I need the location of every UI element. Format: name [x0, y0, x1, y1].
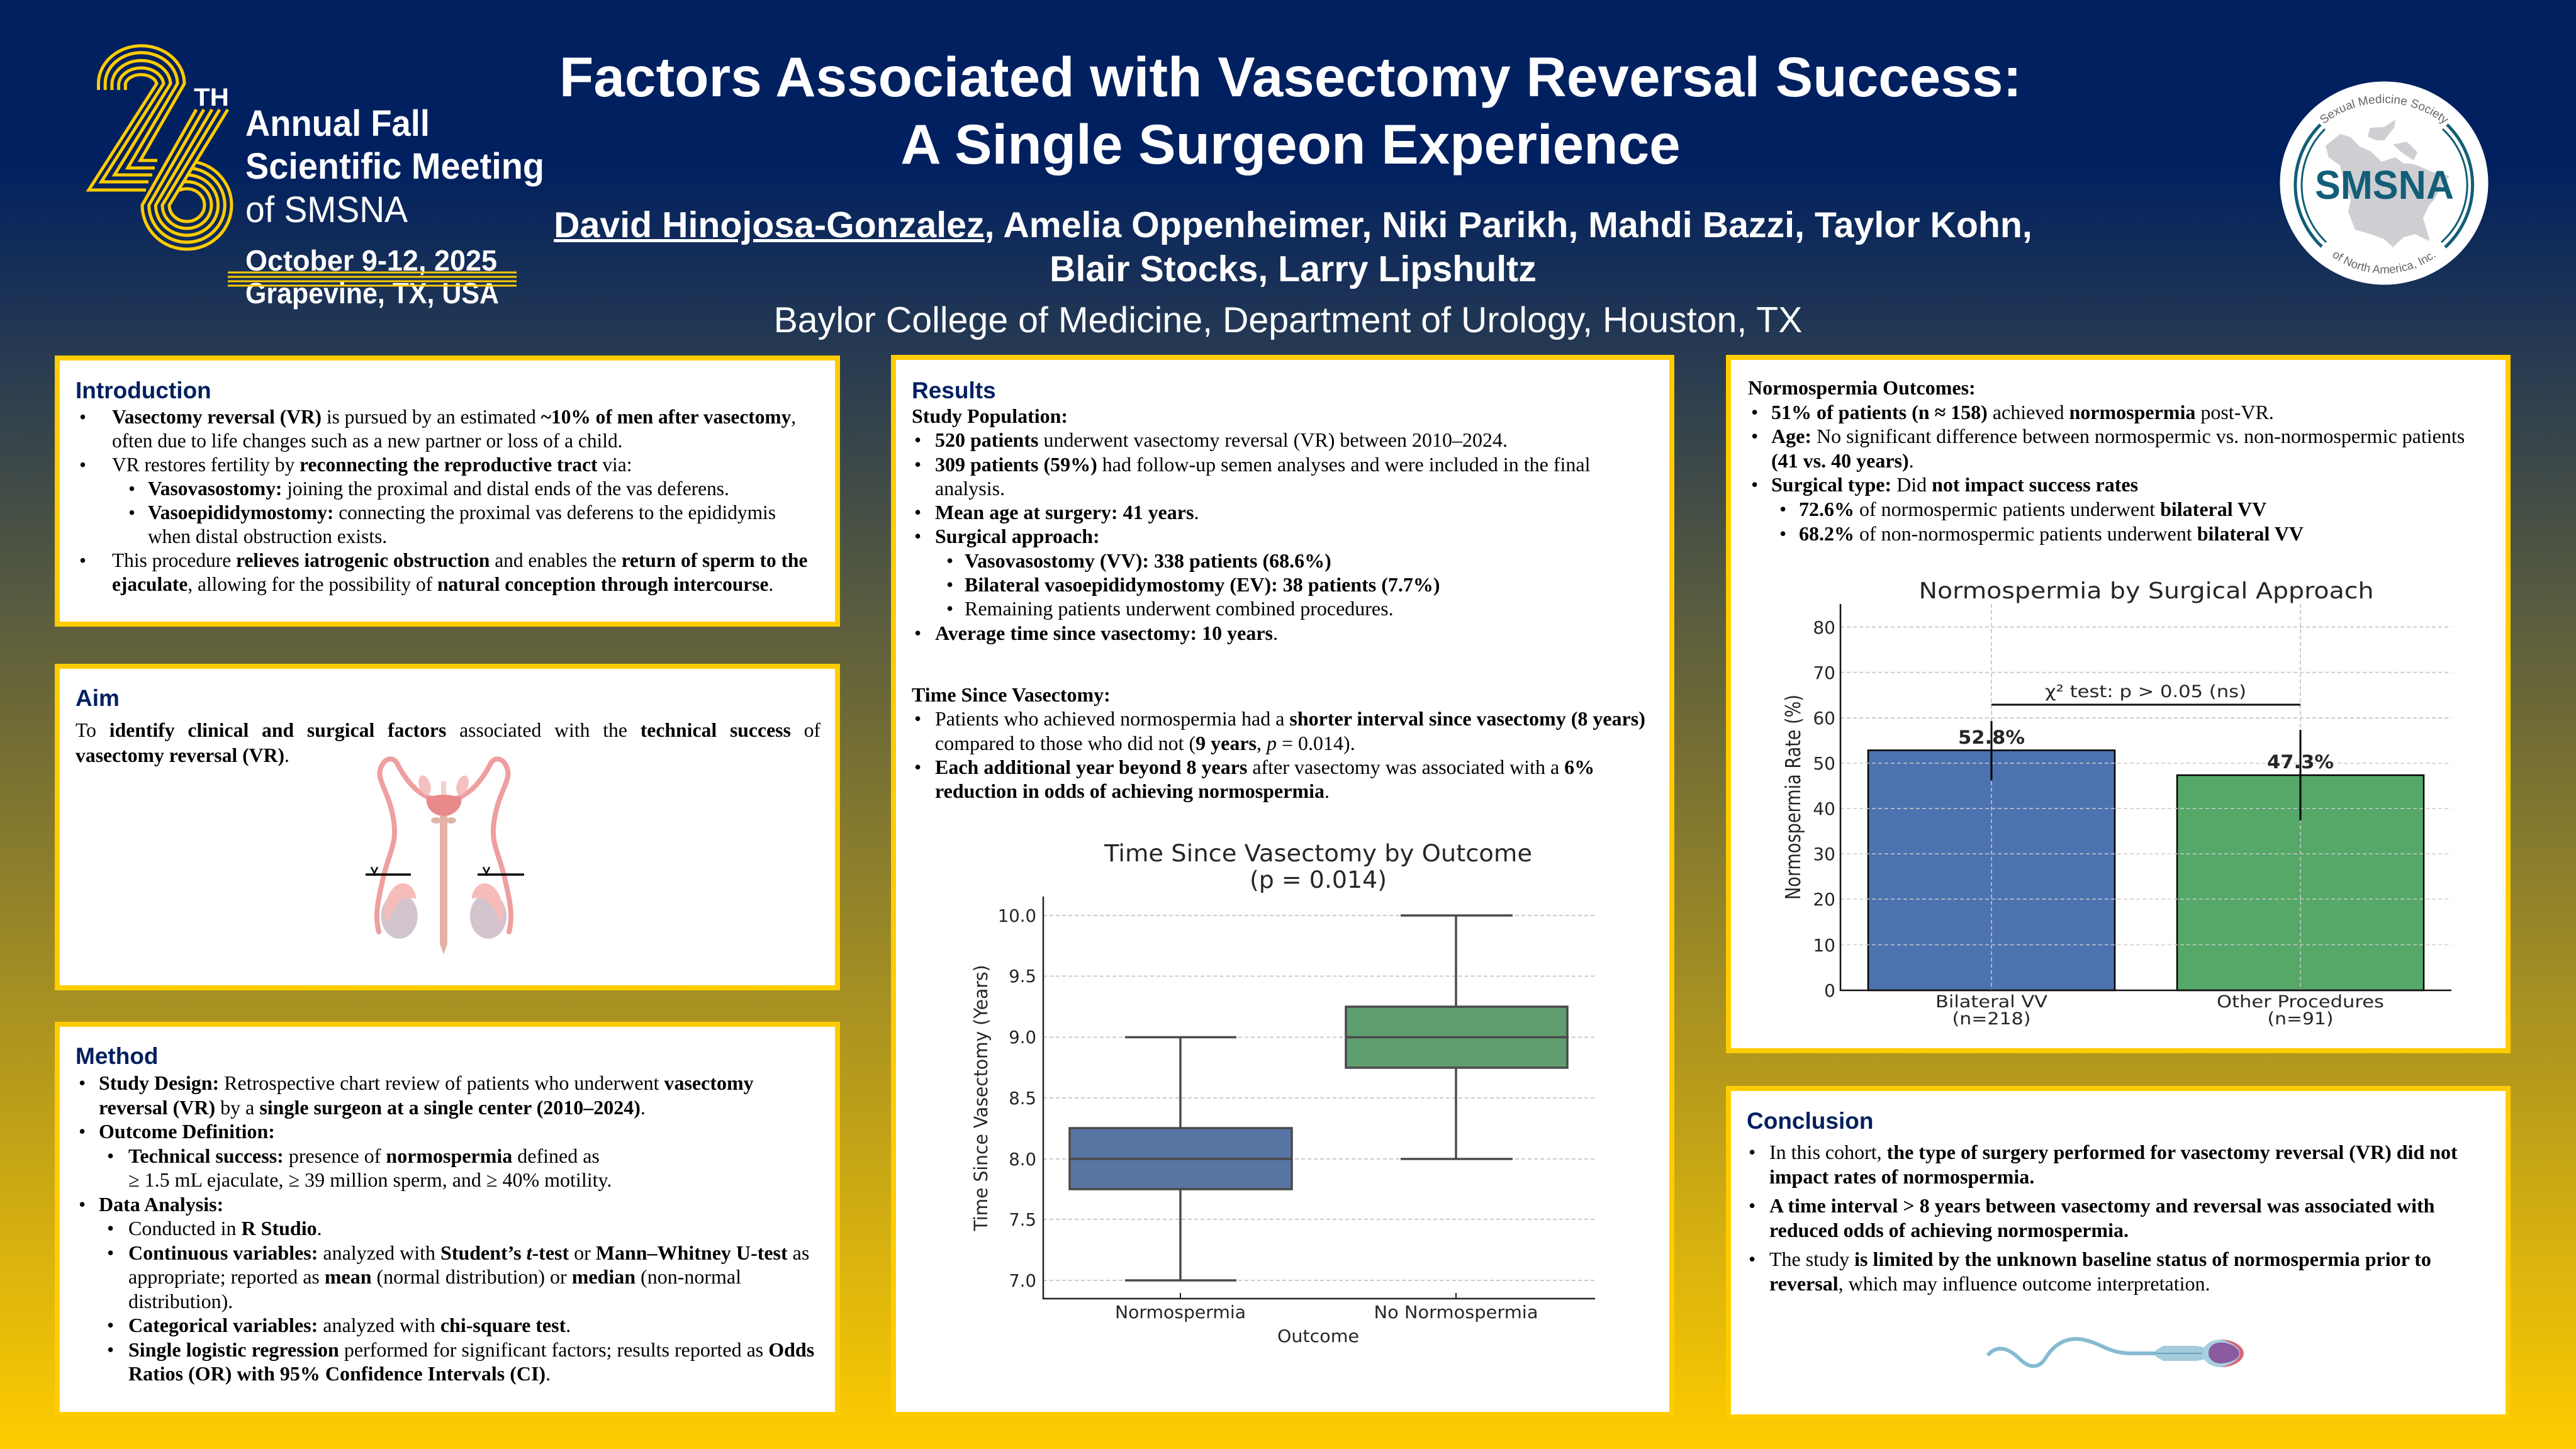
significance bracket: χ² test: p > 0.05 (ns): [2045, 682, 2246, 702]
text block: method: Continuous variables: analyzed with Student’s t-test or Mann–Whitney U-test as: [128, 1241, 809, 1263]
text block: method: •: [107, 1338, 114, 1360]
text block: method: ≥ 1.5 mL ejaculate, ≥ 39 million sperm, and ≥ 40% motility.: [128, 1168, 612, 1191]
text block: study population: •: [914, 453, 921, 476]
logo curved top text: Sexual Medicine Society: [2321, 94, 2448, 124]
text block: study population: •: [946, 597, 953, 620]
text block: normospermia outcomes: •: [1779, 522, 1786, 545]
text block: method: Technical success: presence of normospermia defined as: [128, 1144, 600, 1166]
text block: introduction: This procedure relieves iatrogenic obstruction and enables the return of sperm to the: [112, 549, 807, 571]
logo wordmark: [194, 84, 544, 310]
heading: aim: Aim: [76, 685, 120, 711]
text block: study population: •: [914, 525, 921, 547]
y axis label: Time Since Vasectomy (Years): [970, 965, 992, 1231]
logo curved bottom text: of North America, Inc.: [2333, 252, 2436, 274]
title: Factors Associated with Vasectomy Reversal Success:: [559, 45, 2022, 108]
text block: conclusion: •: [1749, 1248, 1756, 1270]
authors: Blair Stocks, Larry Lipshultz: [1050, 249, 1537, 289]
logo wordmark: Scientific Meeting: [245, 146, 544, 187]
y axis tick labels: [1813, 617, 1835, 1001]
text block: method: appropriate; reported as mean (normal distribution) or median (non-normal: [128, 1265, 741, 1288]
text block: time since vasectomy: •: [914, 756, 921, 778]
text block: time since vasectomy: reduction in odds of achieving normospermia.: [935, 780, 1330, 802]
affiliation: Baylor College of Medicine, Department of Urology, Houston, TX: [774, 300, 1802, 340]
title: [559, 45, 2022, 176]
text block: conclusion: reduced odds of achieving normospermia.: [1769, 1219, 2129, 1241]
text block: introduction: •: [128, 478, 135, 500]
logo disc: [2280, 82, 2488, 284]
icon: sperm cell: [1982, 1331, 2240, 1369]
text block: conclusion: reversal, which may influence outcome interpretation.: [1769, 1272, 2210, 1295]
text block: introduction: ejaculate, allowing for the possibility of natural conception through intercourse.: [112, 573, 773, 595]
logo wordmark: of SMSNA: [245, 189, 408, 230]
y axis tick labels: 70: [1813, 663, 1835, 683]
text block: method: •: [107, 1314, 114, 1336]
text block: study population: Surgical approach:: [935, 525, 1100, 547]
error bars: [1991, 721, 2300, 820]
text block: conclusion: •: [1749, 1141, 1756, 1163]
y axis tick labels: 60: [1813, 708, 1835, 729]
logo arcs: [2295, 125, 2473, 247]
y axis tick labels: 10.0: [998, 906, 1036, 926]
heading: method: Method: [76, 1043, 159, 1069]
logo wordmark: Annual Fall: [245, 103, 430, 144]
logo wordmark: Grapevine, TX, USA: [245, 277, 499, 310]
text block: study population: •: [914, 428, 921, 451]
text block: conclusion: impact rates of normospermia.: [1769, 1165, 2034, 1188]
box: no normospermia: [1346, 915, 1567, 1159]
text block: study population: Mean age at surgery: 41 years.: [935, 501, 1199, 523]
text block: aim: vasectomy reversal (VR).: [76, 744, 289, 766]
chart title: (p = 0.014): [1250, 866, 1387, 893]
vasectomy ligatures: [366, 867, 524, 876]
text block: normospermia outcomes: Surgical type: Did not impact success rates: [1771, 473, 2138, 496]
y axis tick labels: 7.5: [1009, 1210, 1036, 1230]
text block: introduction: Vasectomy reversal (VR) is pursued by an estimated ~10% of men after vasectomy,: [112, 406, 796, 428]
x axis labels: No Normospermia: [1374, 1302, 1538, 1323]
text block: study population: Bilateral vasoepididymostomy (EV): 38 patients (7.7%): [965, 573, 1440, 596]
text block: conclusion: [1747, 1140, 2458, 1296]
text block: method: Ratios (OR) with 95% Confidence Intervals (CI).: [128, 1362, 551, 1385]
value label: 47.3%: 47.3%: [2267, 751, 2334, 773]
panel: conclusion: [1726, 1086, 2511, 1419]
x axis labels: Normospermia: [1115, 1302, 1246, 1323]
x axis labels: [1935, 992, 2384, 1029]
text block: method: Single logistic regression performed for significant factors; results reported as Odds: [128, 1338, 814, 1360]
text block: study population: Vasovasostomy (VV): 338 patients (68.6%): [965, 549, 1331, 572]
text block: method: Study Design: Retrospective chart review of patients who underwent vasectomy: [99, 1071, 754, 1094]
y axis tick labels: 50: [1813, 753, 1835, 774]
text block: normospermia outcomes: •: [1751, 425, 1758, 447]
society logo: SMSNA: [2280, 82, 2488, 284]
text block: method: •: [107, 1144, 114, 1166]
text block: normospermia outcomes: Age: No significant difference between normospermic vs. non-normospermic patients: [1771, 425, 2465, 447]
y axis tick labels: 30: [1813, 844, 1835, 864]
text block: normospermia outcomes: •: [1751, 473, 1758, 496]
text block: method: •: [79, 1071, 86, 1094]
title: A Single Surgeon Experience: [900, 113, 1681, 176]
x axis labels: Other Procedures: [2217, 992, 2384, 1012]
logo wordmark: TH: [194, 84, 229, 111]
heading: introduction: Introduction: [76, 378, 211, 403]
panel: method: [55, 1022, 840, 1417]
bar: bilateral VV: [1868, 750, 2115, 990]
value label: 52.8%: 52.8%: [1958, 727, 2025, 748]
text block: conclusion: The study is limited by the unknown baseline status of normospermia prior to: [1769, 1248, 2431, 1270]
bar: other procedures: [2177, 775, 2424, 990]
text block: time since vasectomy: •: [914, 707, 921, 730]
urethra: [440, 816, 447, 954]
text block: introduction: [79, 406, 807, 595]
y axis tick labels: 0: [1824, 980, 1835, 1001]
text block: method: Outcome Definition:: [99, 1120, 275, 1143]
text block: aim: To identify clinical and surgical factors associated with the technical success of: [76, 719, 820, 741]
panel: aim: [55, 664, 840, 990]
y axis tick labels: 10: [1813, 935, 1835, 956]
text block: time since vasectomy: [912, 683, 1645, 802]
text block: conclusion: A time interval > 8 years between vasectomy and reversal was associated with: [1769, 1194, 2434, 1217]
y axis tick labels: 8.0: [1009, 1150, 1036, 1170]
text block: time since vasectomy: Patients who achieved normospermia had a shorter interval since vasectomy (8 years): [935, 707, 1645, 730]
text block: study population: 520 patients underwent vasectomy reversal (VR) between 2010–2024.: [935, 428, 1508, 451]
y axis tick labels: 80: [1813, 617, 1835, 638]
bar chart: normospermia by surgical approach: [1781, 578, 2451, 1029]
text block: method: distribution).: [128, 1290, 233, 1312]
text block: introduction: •: [79, 549, 86, 571]
text block: study population: Average time since vasectomy: 10 years.: [935, 622, 1278, 644]
text block: method: •: [79, 1120, 86, 1143]
panel: normospermia outcomes: [1726, 355, 2511, 1053]
text block: study population: [912, 405, 1591, 644]
panel: introduction: [55, 355, 840, 627]
y axis tick labels: 7.0: [1009, 1271, 1036, 1291]
text block: introduction: •: [79, 406, 86, 428]
box plot: time since vasectomy by outcome: [970, 840, 1595, 1346]
chart title: Normospermia by Surgical Approach: [1919, 578, 2373, 604]
y axis tick labels: [998, 906, 1036, 1291]
icon: numeral 26 striped: [89, 46, 232, 249]
vas deferens: [377, 759, 511, 932]
y axis tick labels: 40: [1813, 798, 1835, 819]
text block: study population: Remaining patients underwent combined procedures.: [965, 597, 1394, 620]
text block: introduction: VR restores fertility by reconnecting the reproductive tract via:: [112, 454, 632, 476]
icon: male reproductive anatomy with vasectomy: [366, 756, 524, 954]
text block: method: Conducted in R Studio.: [128, 1217, 322, 1239]
y axis tick labels: 9.5: [1009, 966, 1036, 987]
x axis labels: [1115, 1302, 1538, 1346]
testes and epididymis: [381, 883, 507, 939]
box: normospermia: [1070, 1037, 1292, 1280]
text block: normospermia outcomes: Normospermia Outcomes:: [1748, 376, 1976, 399]
text block: aim: [76, 719, 820, 766]
text block: normospermia outcomes: •: [1751, 401, 1758, 423]
text block: study population: •: [946, 549, 953, 572]
x axis labels: Outcome: [1277, 1326, 1359, 1346]
text block: normospermia outcomes: 68.2% of non-normospermic patients underwent bilateral VV: [1799, 522, 2304, 545]
text block: method: Categorical variables: analyzed with chi-square test.: [128, 1314, 571, 1336]
text block: normospermia outcomes: •: [1779, 498, 1786, 520]
text block: method: [79, 1071, 814, 1385]
logo SMSNA lettering: SMSNA: [2315, 162, 2454, 208]
panel: results: [891, 355, 1674, 1417]
conference logo: 26th Annual Fall Scientific Meeting: [86, 44, 544, 310]
text block: method: •: [79, 1193, 86, 1216]
text block: time since vasectomy: Each additional year beyond 8 years after vasectomy was associated with a 6%: [935, 756, 1594, 778]
text block: method: reversal (VR) by a single surgeon at a single center (2010–2024).: [99, 1096, 646, 1119]
text block: method: •: [107, 1217, 114, 1239]
text block: introduction: Vasoepididymostomy: connecting the proximal vas deferens to the epididymis: [148, 501, 776, 523]
text block: method: Data Analysis:: [99, 1193, 223, 1216]
text block: normospermia outcomes: (41 vs. 40 years).: [1771, 449, 1914, 472]
text block: normospermia outcomes: [1748, 376, 2465, 545]
prostate and seminal vesicles: [416, 774, 471, 824]
text block: time since vasectomy: Time Since Vasectomy:: [912, 683, 1111, 706]
text block: study population: •: [946, 573, 953, 596]
text block: introduction: •: [79, 454, 86, 476]
text block: introduction: Vasovasostomy: joining the proximal and distal ends of the vas deferens.: [148, 478, 729, 500]
text block: study population: analysis.: [935, 477, 1005, 500]
text block: study population: •: [914, 622, 921, 644]
text block: conclusion: •: [1749, 1194, 1756, 1217]
heading: results: Results: [912, 378, 996, 403]
text block: introduction: •: [128, 501, 135, 523]
text block: time since vasectomy: compared to those who did not (9 years, p = 0.014).: [935, 732, 1355, 754]
text block: study population: 309 patients (59%) had follow-up semen analyses and were included in the final: [935, 453, 1591, 476]
y axis label: Normospermia Rate (%): [1781, 695, 1805, 900]
text block: study population: •: [914, 501, 921, 523]
heading: conclusion: Conclusion: [1747, 1108, 1873, 1134]
authors: [554, 205, 2032, 289]
chart title: Time Since Vasectomy by Outcome: [1104, 840, 1532, 867]
y axis tick labels: 9.0: [1009, 1027, 1036, 1048]
y axis tick labels: 8.5: [1009, 1088, 1036, 1109]
text block: normospermia outcomes: 72.6% of normospermic patients underwent bilateral VV: [1799, 498, 2266, 520]
authors: David Hinojosa-Gonzalez, Amelia Oppenheimer, Niki Parikh, Mahdi Bazzi, Taylor Kohn,: [554, 205, 2032, 245]
logo date stripes: [228, 272, 517, 286]
text block: introduction: when distal obstruction exists.: [148, 525, 387, 547]
text block: method: •: [107, 1241, 114, 1263]
text block: introduction: often due to life changes such as a new partner or loss of a child.: [112, 430, 623, 452]
text block: conclusion: In this cohort, the type of surgery performed for vasectomy reversal (VR) did not: [1769, 1141, 2458, 1163]
text block: study population: Study Population:: [912, 405, 1068, 427]
text block: normospermia outcomes: 51% of patients (n ≈ 158) achieved normospermia post-VR.: [1771, 401, 2274, 423]
chart title: [1104, 840, 1532, 893]
logo wordmark: October 9-12, 2025: [245, 244, 497, 277]
x axis labels: (n=218): [1952, 1009, 2031, 1029]
x axis labels: Bilateral VV: [1935, 992, 2048, 1012]
map of North America: [2326, 120, 2450, 247]
y axis tick labels: 20: [1813, 889, 1835, 910]
x axis labels: (n=91): [2268, 1009, 2333, 1029]
